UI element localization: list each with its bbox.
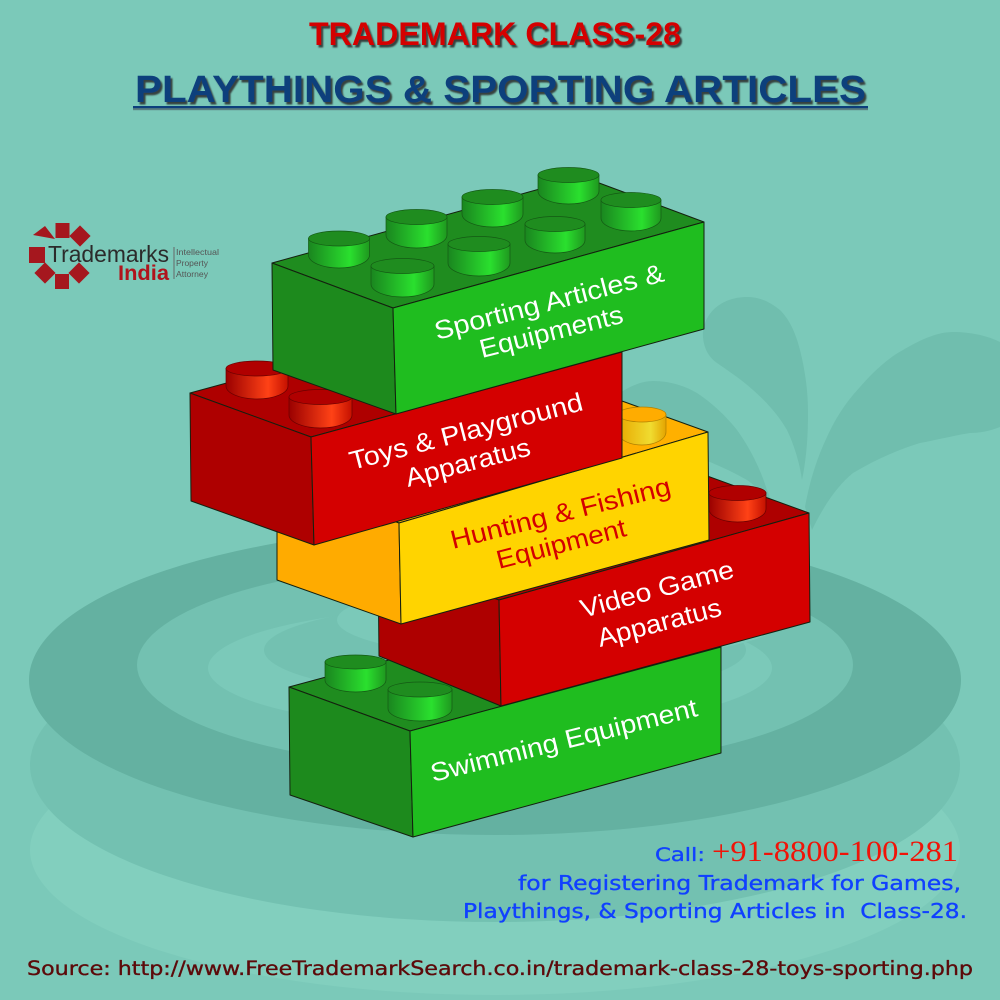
title: trademark class: TRADEMARK CLASS-28 <box>309 16 681 52</box>
logo India: India <box>118 262 169 285</box>
call text line 1: for Registering Trademark for Games, <box>518 871 961 895</box>
logo wordmark: Trademarks <box>48 241 169 267</box>
title underline <box>133 106 868 110</box>
brick: video game apparatus <box>378 469 810 706</box>
label: Swimming Equipment <box>427 692 701 788</box>
stud <box>618 407 666 445</box>
label: Equipments <box>476 299 626 364</box>
stud <box>289 390 352 428</box>
brick: swimming equipment <box>289 603 721 837</box>
stud <box>226 361 288 399</box>
source line: Source: http://www.FreeTrademarkSearch.co.in/trademark-class-28-toys-sporting.php <box>27 957 973 980</box>
brick: toys and playground apparatus <box>190 308 622 545</box>
studs <box>308 168 661 297</box>
logo tagline: Attorney <box>176 269 209 279</box>
label: Apparatus <box>402 432 533 493</box>
phone number: +91-8800-100-281 <box>712 835 958 868</box>
call text line 2: Playthings, & Sporting Articles in Class-28. <box>463 899 967 923</box>
call to action <box>463 835 967 923</box>
label: Hunting & Fishing <box>447 471 674 555</box>
brick: hunting and fishing equipment <box>277 388 709 624</box>
label: Apparatus <box>594 592 724 653</box>
logo tagline <box>176 247 219 279</box>
logo tagline: Intellectual <box>176 247 219 257</box>
stud <box>388 682 452 721</box>
stud <box>325 655 386 692</box>
label: Equipment <box>493 512 630 575</box>
logo: Trademarks India <box>29 223 219 289</box>
label: Toys & Playground <box>346 387 586 476</box>
logo mark: ring of red squares <box>29 223 91 289</box>
logo tagline: Property <box>176 258 209 268</box>
call label: Call: <box>655 844 705 866</box>
brick: sporting articles and equipments <box>272 168 704 414</box>
title: playthings and sporting articles: PLAYTHINGS & SPORTING ARTICLES <box>135 69 866 111</box>
label: Sporting Articles & <box>431 258 667 346</box>
label: Video Game <box>577 554 737 624</box>
stud <box>709 486 766 522</box>
